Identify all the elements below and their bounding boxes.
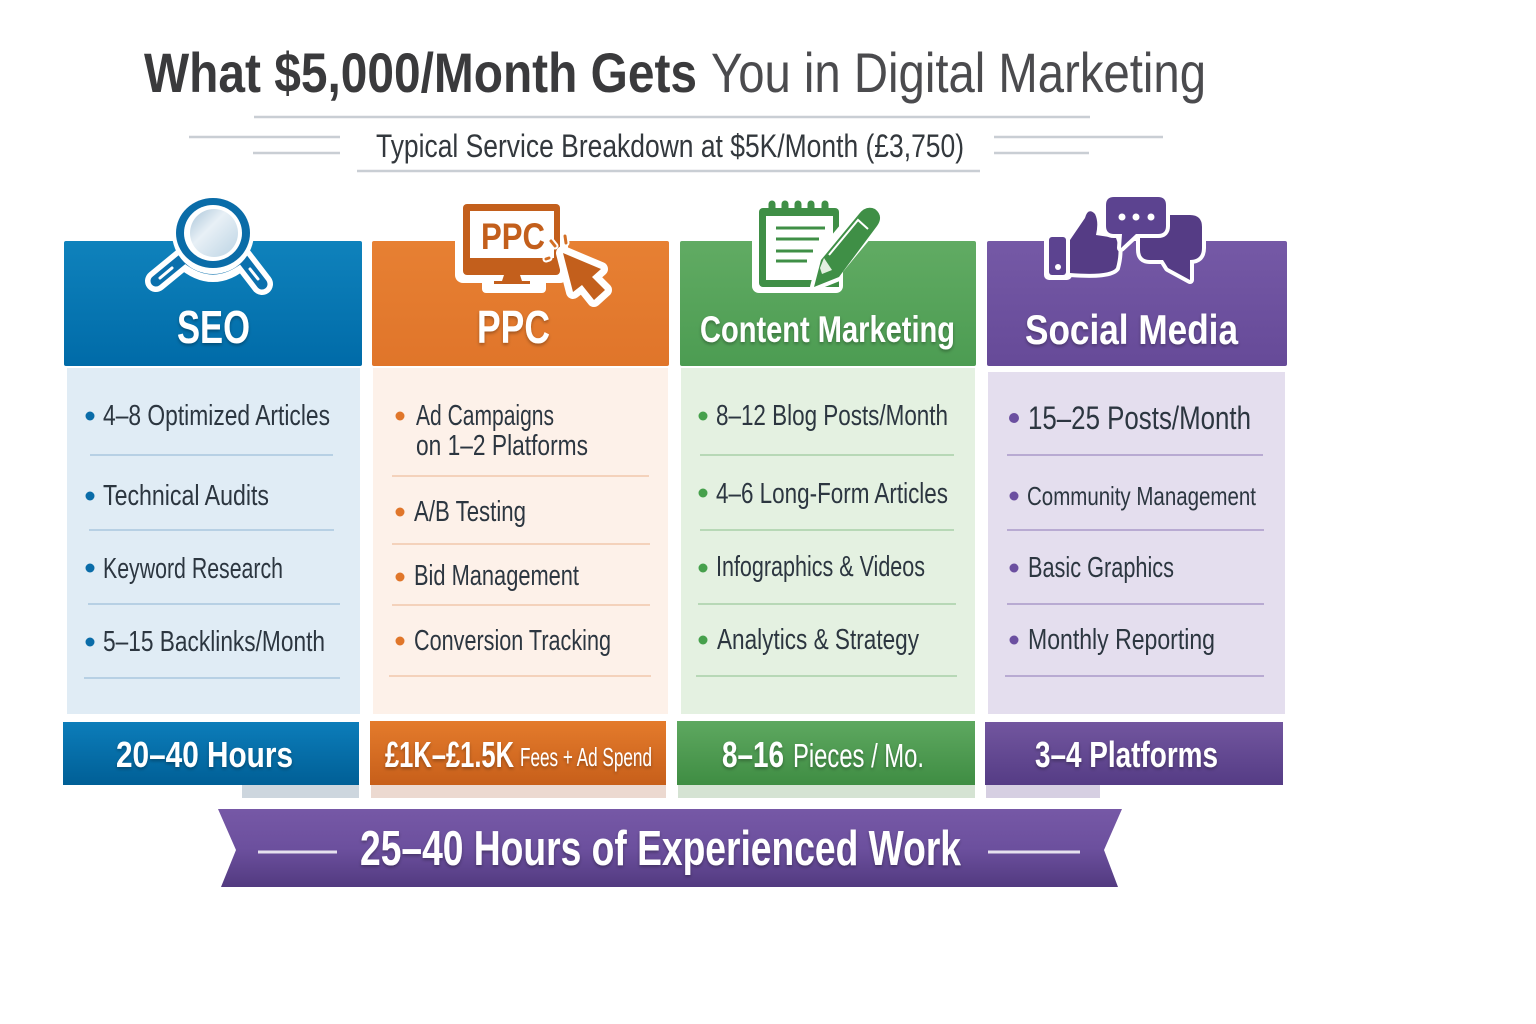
SEO header: SEO bbox=[177, 301, 250, 353]
SEO list: Keyword Research bbox=[103, 553, 283, 585]
SEO footer bbox=[63, 722, 359, 798]
icon: magnifying glass bbox=[156, 192, 262, 284]
panel: PPC bbox=[370, 204, 669, 798]
PPC list: Ad Campaigns bbox=[416, 400, 554, 432]
Content Marketing footer bbox=[677, 721, 975, 798]
Content Marketing header: Content Marketing bbox=[700, 309, 955, 350]
Content Marketing list: Infographics & Videos bbox=[716, 551, 925, 583]
Content Marketing list: 8–12 Blog Posts/Month bbox=[716, 400, 948, 432]
PPC header bbox=[372, 241, 669, 366]
SEO header bbox=[64, 241, 362, 366]
icon: thumbs up and speech bubbles bbox=[1044, 197, 1202, 280]
Content Marketing list bbox=[696, 400, 957, 676]
PPC list: Conversion Tracking bbox=[414, 625, 611, 657]
title: What $5,000/Month Gets bbox=[144, 41, 697, 104]
PPC footer: £1K–£1.5K bbox=[385, 734, 514, 775]
Content Marketing list: 4–6 Long-Form Articles bbox=[716, 478, 948, 510]
PPC list: on 1–2 Platforms bbox=[416, 430, 588, 462]
PPC header: PPC bbox=[477, 301, 550, 353]
Content Marketing footer: 8–16 bbox=[722, 734, 784, 775]
SEO footer: 20–40 Hours bbox=[116, 734, 293, 775]
Social Media header bbox=[987, 241, 1287, 366]
Social Media list: 15–25 Posts/Month bbox=[1028, 400, 1251, 436]
subtitle: Typical Service Breakdown at $5K/Month (£3,750) bbox=[376, 128, 964, 164]
ribbon banner bbox=[218, 809, 1122, 887]
Social Media list: Monthly Reporting bbox=[1028, 624, 1215, 656]
Social Media list: Basic Graphics bbox=[1028, 552, 1174, 584]
Social Media header: Social Media bbox=[1025, 306, 1239, 353]
Social Media list bbox=[1005, 400, 1264, 676]
panel: SEO bbox=[63, 192, 362, 798]
Social Media footer: 3–4 Platforms bbox=[1035, 734, 1218, 775]
SEO list bbox=[84, 400, 340, 678]
Content Marketing list: Analytics & Strategy bbox=[717, 624, 919, 656]
Social Media footer bbox=[985, 722, 1283, 798]
ribbon banner: 25–40 Hours of Experienced Work bbox=[360, 822, 962, 876]
Social Media list: Community Management bbox=[1027, 481, 1257, 511]
Content Marketing footer: Pieces / Mo. bbox=[793, 737, 924, 774]
panel: Content Marketing bbox=[677, 203, 976, 798]
PPC list: A/B Testing bbox=[414, 496, 526, 528]
PPC list bbox=[389, 400, 651, 676]
title: You in Digital Marketing bbox=[711, 41, 1206, 104]
PPC footer bbox=[370, 721, 666, 798]
panel: Social Media bbox=[985, 197, 1287, 798]
SEO list: 5–15 Backlinks/Month bbox=[103, 626, 325, 658]
title bbox=[144, 41, 1206, 104]
icon: monitor with cursor: PPC bbox=[481, 216, 545, 257]
PPC list: Bid Management bbox=[414, 560, 579, 592]
icon: notepad and pencil bbox=[752, 203, 880, 293]
PPC footer: Fees + Ad Spend bbox=[520, 742, 652, 772]
SEO list: 4–8 Optimized Articles bbox=[103, 400, 330, 432]
Content Marketing header bbox=[680, 241, 976, 366]
SEO list: Technical Audits bbox=[103, 480, 269, 512]
icon: monitor with cursor bbox=[455, 204, 605, 300]
